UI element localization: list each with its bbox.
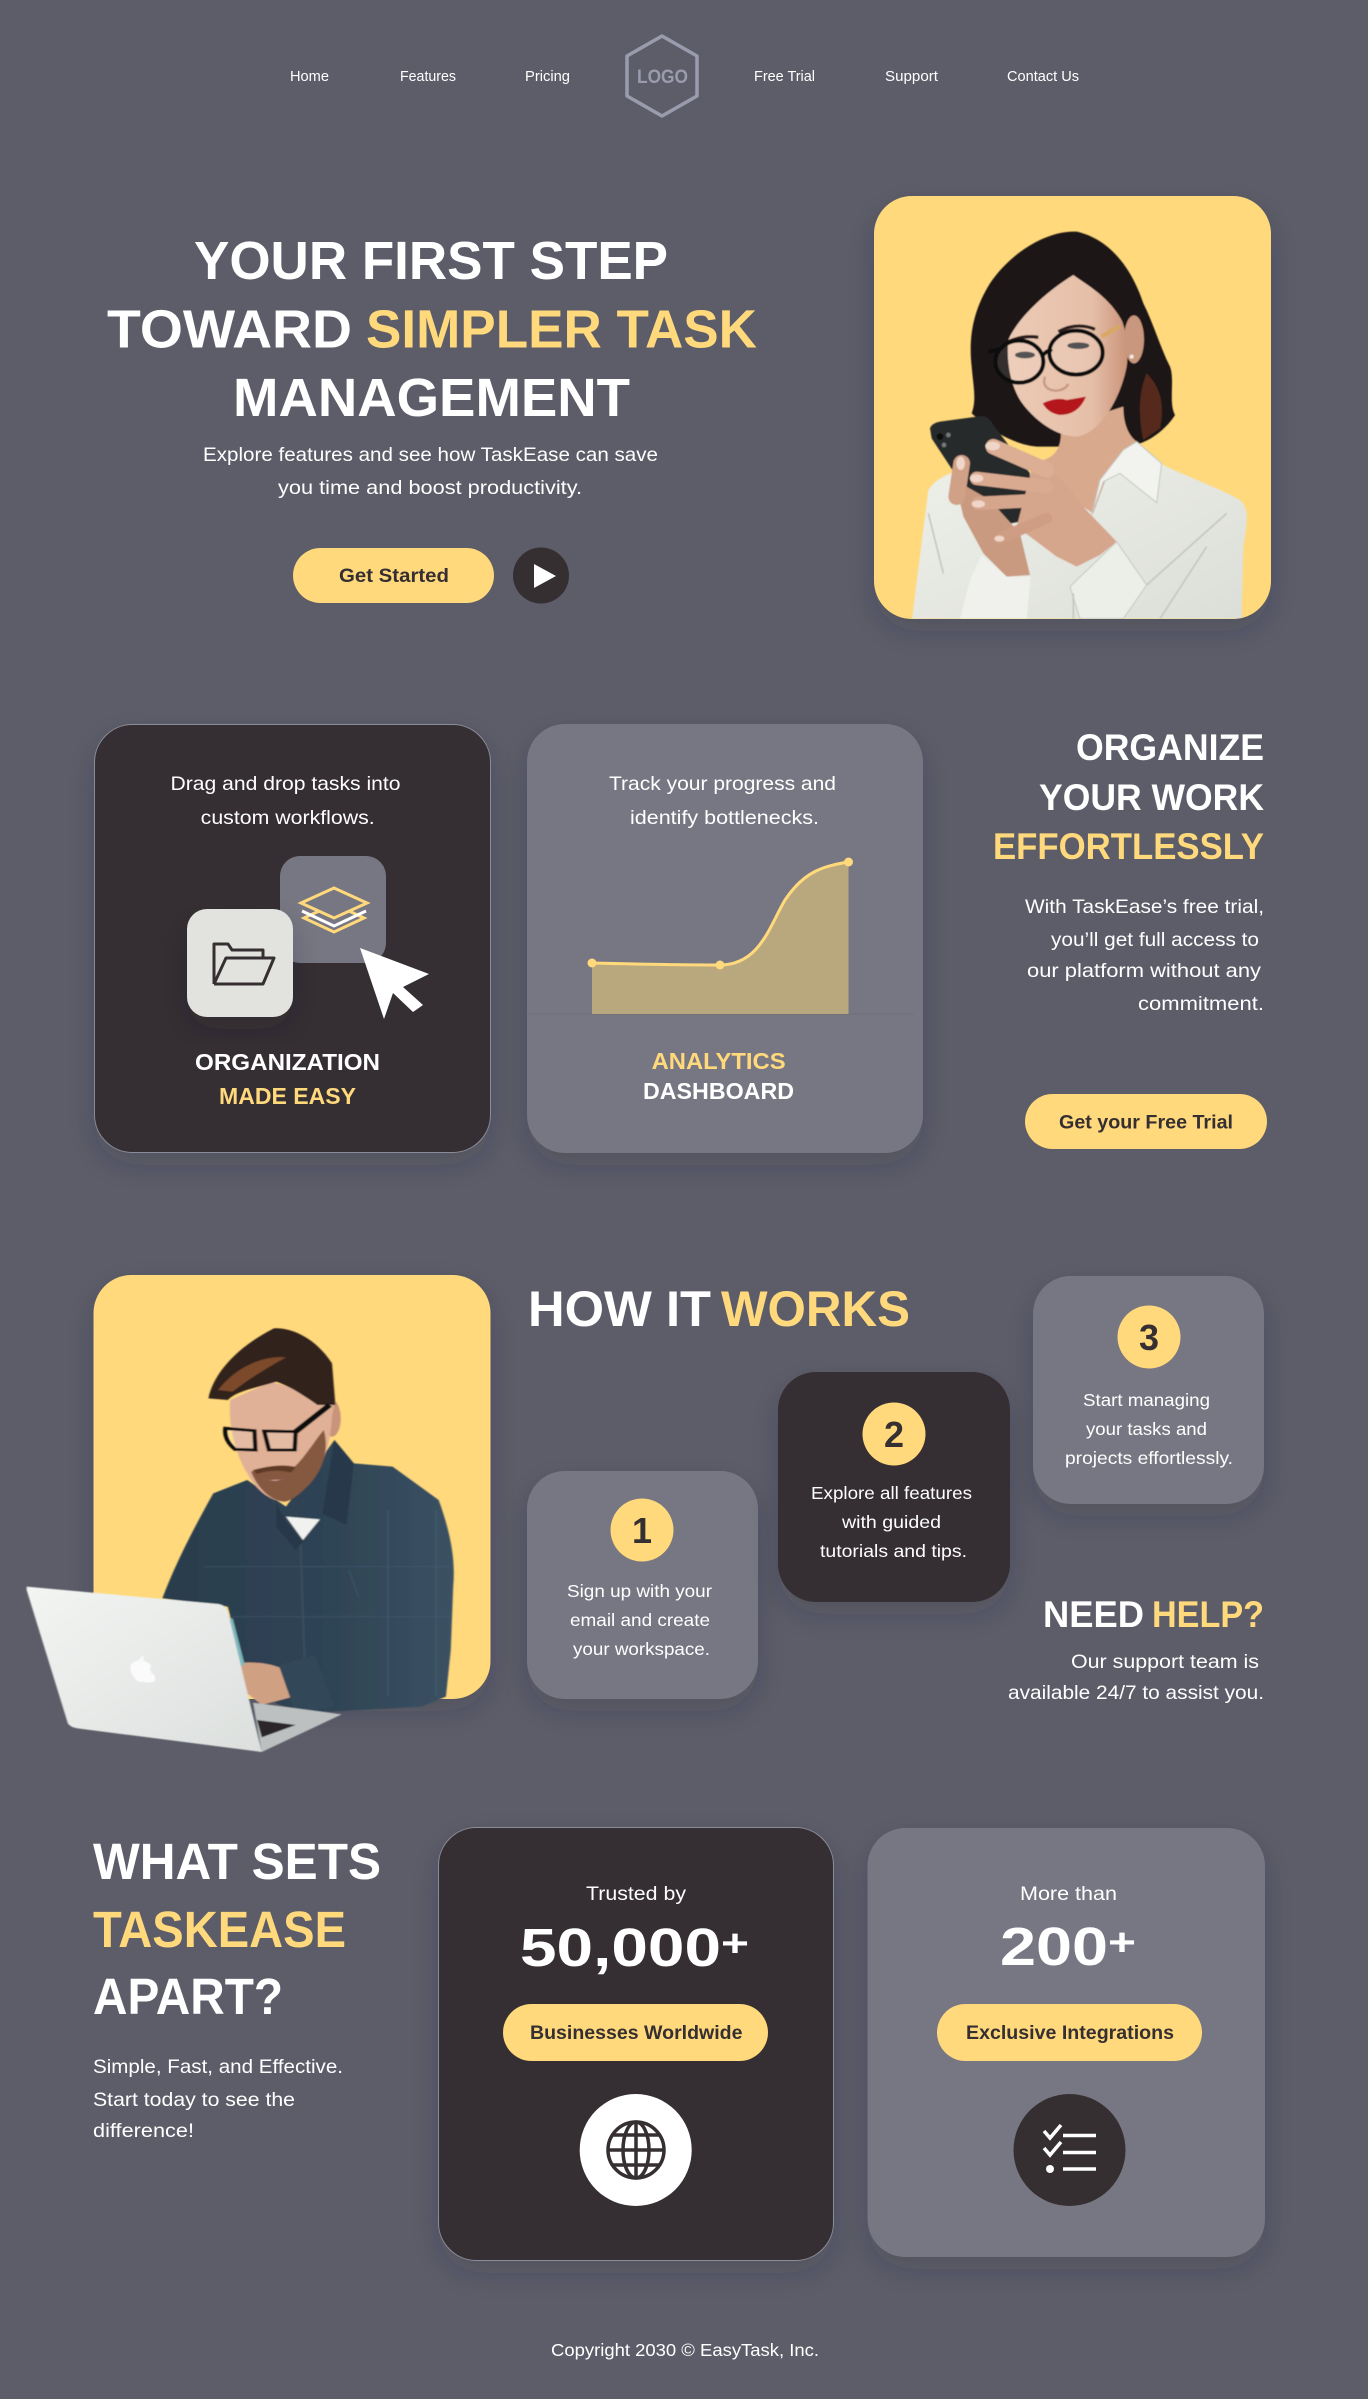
- laptop screen edge: [228, 1618, 245, 1667]
- free trial button: [1025, 1094, 1267, 1149]
- organize heading: [993, 727, 1264, 867]
- step 1 text: email and create: [570, 1610, 710, 1630]
- ear: [323, 1400, 341, 1437]
- organize heading: YOUR WORK: [1039, 777, 1264, 818]
- integrations pill: Exclusive Integrations: [966, 2023, 1174, 2044]
- footer copyright: Copyright 2030 © EasyTask, Inc.: [551, 2340, 819, 2360]
- neck: [1043, 407, 1137, 513]
- analytics heading: DASHBOARD: [643, 1078, 794, 1104]
- hero section: [107, 196, 1271, 619]
- step 1 text: your workspace.: [573, 1639, 710, 1659]
- organize body text: [1025, 896, 1264, 1015]
- how it works title: HOW IT: [528, 1281, 711, 1337]
- nav links left: Pricing: [525, 69, 570, 85]
- right forearm palm: [1017, 463, 1117, 567]
- logo hexagon: [627, 36, 697, 116]
- logo hexagon: LOGO: [637, 67, 688, 88]
- hero title: MANAGEMENT: [233, 368, 630, 428]
- analytics heading: ANALYTICS: [652, 1048, 786, 1074]
- step 3 text: Start managing: [1083, 1390, 1210, 1410]
- step 2 text: tutorials and tips.: [820, 1541, 967, 1561]
- cuffs: [1070, 542, 1147, 619]
- organize body text: With TaskEase’s free trial,: [1025, 896, 1264, 918]
- face: [230, 1382, 334, 1502]
- left wrist: [960, 486, 1030, 577]
- fingers: [957, 447, 1047, 538]
- hero title: YOUR FIRST STEP: [194, 231, 668, 291]
- stat card: businesses: [438, 1828, 834, 2260]
- icon: layers tile: [280, 856, 386, 963]
- how it works title: [528, 1281, 910, 1337]
- step 1 number: [610, 1498, 674, 1562]
- need help heading: HELP?: [1152, 1594, 1264, 1635]
- hand: [238, 1662, 293, 1705]
- get started button: Get Started: [339, 566, 449, 587]
- section body text: [93, 2056, 343, 2142]
- section body text: Simple, Fast, and Effective.: [93, 2056, 343, 2078]
- nav links right: Free Trial: [754, 69, 815, 85]
- step 2 text: with guided: [841, 1512, 941, 1532]
- step 3 card: [1033, 1276, 1264, 1504]
- section title: WHAT SETS: [93, 1833, 381, 1890]
- need help text: Our support team is: [1071, 1651, 1259, 1673]
- apple mark: [130, 1655, 155, 1682]
- features section: [94, 724, 1267, 1153]
- hair: [208, 1328, 335, 1405]
- shirt: [912, 442, 1247, 619]
- need help heading: NEED: [1043, 1594, 1144, 1635]
- hero subtitle: [203, 444, 658, 499]
- section body text: difference!: [93, 2120, 194, 2142]
- panel: analytics dashboard: [527, 724, 923, 1153]
- nav links left: [290, 69, 570, 85]
- organization description: custom workflows.: [201, 807, 375, 829]
- ear and earring: [1124, 315, 1144, 363]
- panel: organization made easy: [94, 724, 490, 1152]
- step 2 number: [862, 1402, 926, 1466]
- step 3 text: your tasks and: [1086, 1419, 1207, 1439]
- trusted by label: Trusted by: [586, 1883, 686, 1905]
- step 1 number: 1: [632, 1510, 652, 1551]
- step 3 text: projects effortlessly.: [1065, 1448, 1233, 1468]
- step 3 text: [1065, 1390, 1233, 1468]
- section body text: Start today to see the: [93, 2089, 295, 2111]
- step 1 card: [527, 1471, 758, 1699]
- area chart: [527, 858, 914, 1014]
- stat number 50,000+: +: [721, 1923, 749, 1965]
- organization heading: MADE EASY: [219, 1083, 356, 1109]
- laptop base: [253, 1703, 342, 1752]
- stat number 200+: +: [1108, 1922, 1136, 1964]
- get started button: [293, 548, 494, 603]
- section title: APART?: [93, 1968, 283, 2025]
- glasses: [225, 1428, 296, 1450]
- t-shirt: [286, 1517, 320, 1540]
- collar: [1092, 442, 1162, 515]
- organization heading: [195, 1049, 380, 1109]
- organize body text: you’ll get full access to: [1051, 929, 1259, 951]
- organize body text: commitment.: [1138, 993, 1264, 1015]
- fringe: [1006, 269, 1123, 346]
- section title: TASKEASE: [93, 1901, 346, 1958]
- hero title: TOWARD: [107, 300, 352, 360]
- free trial button: Get your Free Trial: [1059, 1112, 1233, 1134]
- need help text: [1008, 1651, 1264, 1704]
- laptop lid: [27, 1587, 262, 1752]
- hero title: SIMPLER TASK: [366, 300, 757, 360]
- nav links right: Contact Us: [1007, 69, 1079, 85]
- nav links left: Features: [400, 69, 456, 85]
- organize body text: our platform without any: [1027, 960, 1261, 982]
- more than label: More than: [1020, 1883, 1117, 1905]
- organization description: Drag and drop tasks into: [170, 773, 401, 795]
- how it works title: WORKS: [721, 1281, 910, 1337]
- organize heading: ORGANIZE: [1076, 727, 1264, 768]
- collar: [322, 1440, 354, 1525]
- analytics description: [609, 773, 836, 829]
- icon: checklist: [1014, 2094, 1126, 2206]
- brows and eyes: [1008, 326, 1095, 342]
- nose: [1044, 377, 1068, 391]
- step 3 number: [1118, 1306, 1180, 1368]
- analytics description: Track your progress and: [609, 773, 836, 795]
- beard: [251, 1430, 326, 1502]
- step 2 card: [778, 1372, 1010, 1602]
- cuff: [279, 1655, 334, 1713]
- hero subtitle: Explore features and see how TaskEase can save: [203, 444, 658, 466]
- organize heading: EFFORTLESSLY: [993, 826, 1264, 867]
- stat number 200+: 200: [1000, 1917, 1108, 1977]
- shirt folds: [928, 513, 1227, 619]
- integrations pill: [937, 2004, 1202, 2061]
- glasses: [995, 341, 1043, 383]
- step 2 text: [811, 1483, 972, 1561]
- step 1 text: [567, 1581, 712, 1659]
- lips: [1043, 397, 1086, 415]
- phone: [930, 416, 1030, 527]
- hero photo card: woman with phone: [874, 196, 1271, 619]
- photo card: man at laptop: [27, 1275, 490, 1752]
- analytics heading: [643, 1048, 794, 1104]
- stat number 50,000+: 50,000: [520, 1918, 721, 1978]
- nav links right: [754, 69, 1079, 85]
- businesses pill: Businesses Worldwide: [530, 2023, 742, 2044]
- organization heading: ORGANIZATION: [195, 1049, 380, 1075]
- nails: [956, 442, 1004, 542]
- nav links left: Home: [290, 69, 329, 85]
- hair back: [971, 232, 1175, 447]
- face: [1008, 270, 1127, 437]
- step 1 text: Sign up with your: [567, 1581, 712, 1601]
- step 2 number: 2: [884, 1414, 904, 1455]
- analytics description: identify bottlenecks.: [630, 807, 819, 829]
- hero subtitle: you time and boost productivity.: [278, 477, 582, 499]
- hero title: [107, 231, 757, 428]
- stat card: integrations: [868, 1828, 1265, 2257]
- shirt: [162, 1440, 454, 1713]
- need help text: available 24/7 to assist you.: [1008, 1682, 1264, 1704]
- what sets taskease apart section: [93, 1828, 1265, 2260]
- navigation bar: [290, 36, 1079, 116]
- play button: [513, 548, 569, 604]
- icon: folder tile: [187, 909, 293, 1017]
- step 2 text: Explore all features: [811, 1483, 972, 1503]
- organization description: [170, 773, 401, 829]
- nav links right: Support: [885, 69, 938, 85]
- section title: [93, 1833, 381, 2025]
- need help heading: [1043, 1594, 1264, 1635]
- step 3 number: 3: [1139, 1317, 1159, 1358]
- icon: cursor arrow: [360, 948, 429, 1019]
- businesses pill: [503, 2004, 768, 2061]
- icon: globe: [580, 2094, 692, 2206]
- how it works section: [27, 1275, 1264, 1752]
- stat number 200+: [1000, 1917, 1136, 1977]
